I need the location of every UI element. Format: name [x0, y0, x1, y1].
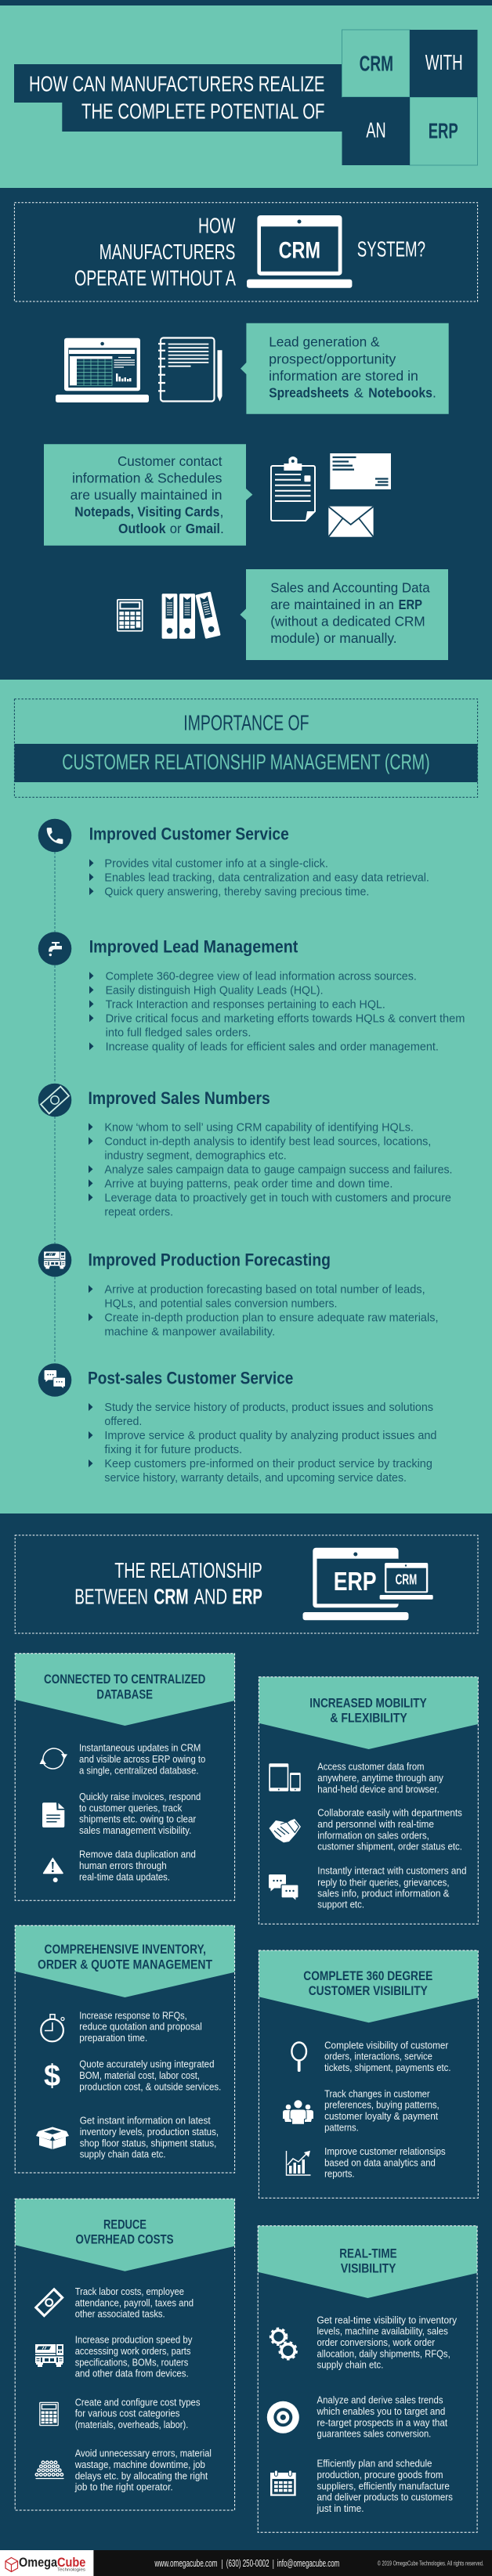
icon: ERP and CRM laptops — [302, 1548, 436, 1620]
logo: OmegaCube Technologies: Technologies — [57, 2568, 85, 2573]
heading: importance of CRM: IMPORTANCE OF — [183, 710, 309, 734]
text: complete visibility: Complete visibility of customer — [324, 2040, 448, 2051]
panel: header — [0, 5, 492, 188]
callout: sales and accounting data: ERP — [399, 597, 422, 612]
text: quote accurately: Quote accurately using integrated — [79, 2059, 215, 2070]
card: increased mobility and flexibility: & FLEXIBILITY — [330, 1712, 407, 1726]
text: quickly raise invoices: sales management visibility. — [79, 1825, 191, 1836]
icon: warning — [43, 1857, 63, 1882]
card: real-time visibility: REAL-TIME — [339, 2246, 397, 2260]
bullet list: Analyze sales campaign data to gauge campaign success and failures. — [104, 1164, 453, 1176]
icon: phone — [38, 819, 71, 852]
icon: CRM laptop: CRM — [279, 237, 320, 263]
text: quote accurately: BOM, material cost, labor cost, — [79, 2070, 200, 2081]
bullet list — [89, 1121, 453, 1218]
title block — [14, 64, 342, 132]
icon: machine — [38, 1243, 71, 1277]
callout: spreadsheets and notebooks — [241, 323, 449, 414]
title word grid: CRM — [360, 52, 393, 76]
bullet list — [89, 857, 429, 898]
icon: chat bubbles — [38, 1363, 71, 1397]
text: track changes — [324, 2088, 440, 2133]
title block: THE COMPLETE POTENTIAL OF — [81, 99, 324, 124]
icon: dollar sign: $ — [44, 2059, 60, 2093]
callout: sales and accounting data: are maintained in an — [270, 597, 394, 612]
bullet list: industry segment, demographics etc. — [104, 1149, 287, 1162]
text: track labor costs — [75, 2286, 194, 2320]
callout: spreadsheets and notebooks: information are stored in — [269, 368, 418, 384]
icon: tablet and phone — [269, 1763, 301, 1791]
text: efficiently plan: production, procure goods from — [317, 2470, 443, 2480]
text: quickly raise invoices — [79, 1791, 201, 1836]
item: improved production forecasting — [38, 1243, 438, 1338]
bullet list: Arrive at production forecasting based on total number of leads, — [104, 1283, 425, 1296]
callout: notepads and visiting cards: , — [219, 504, 223, 520]
heading box: relationship — [15, 1535, 478, 1633]
bullet list: Track Interaction and responses pertaining to each HQL. — [106, 998, 385, 1011]
item: improved production forecasting: Improved Production Forecasting — [88, 1250, 331, 1270]
text: instantaneous updates: Instantaneous updates in CRM — [79, 1743, 201, 1754]
card: reduce overhead costs — [15, 2199, 235, 2510]
text: improve customer relationships — [324, 2146, 446, 2180]
bullet list — [89, 1283, 439, 1338]
callout: notepads and visiting cards: or — [170, 521, 182, 536]
callout: notepads and visiting cards: Notepads, Visiting Cards — [74, 504, 220, 520]
bullet list: Enables lead tracking, data centralization and easy data retrieval. — [104, 871, 429, 884]
logo: OmegaCube Technologies — [0, 2550, 93, 2576]
callout: spreadsheets and notebooks: & — [354, 384, 364, 400]
footer — [0, 2550, 492, 2576]
callout: spreadsheets and notebooks: Lead generation & — [269, 334, 380, 350]
text: get instant information: shop floor status, shipment status, — [80, 2138, 216, 2148]
contact details: info@omegacube.com — [277, 2558, 339, 2569]
item: post-sales customer service: Post-sales Customer Service — [88, 1368, 293, 1387]
text: access customer data — [317, 1762, 444, 1795]
bullet list: Drive critical focus and marketing efforts towards HQLs & convert them — [106, 1012, 465, 1025]
heading box: how manufacturers operate without a CRM system: OPERATE WITHOUT A — [74, 265, 236, 290]
card: comprehensive inventory, order and quote management — [15, 1925, 235, 2173]
text: avoid unnecessary errors — [74, 2448, 212, 2493]
callout: spreadsheets and notebooks: . — [432, 384, 436, 400]
bullet list: Easily distinguish High Quality Leads (HQL). — [106, 984, 323, 997]
card: connected to centralized database: DATABASE — [96, 1687, 153, 1701]
bullet list: Know ‘whom to sell’ using CRM capability of identifying HQLs. — [104, 1121, 414, 1134]
heading box: how manufacturers operate without a CRM system — [14, 203, 478, 301]
callout: spreadsheets and notebooks: Notebooks — [368, 384, 432, 400]
logo: OmegaCube Technologies: Cube — [57, 2556, 85, 2570]
text: remove data duplication: human errors through — [79, 1860, 167, 1871]
callout: sales and accounting data — [240, 569, 448, 660]
contact details: (630) 250-0002 — [226, 2558, 270, 2569]
logo: OmegaCube Technologies: Omega — [19, 2556, 58, 2570]
text: increase response — [79, 2010, 202, 2044]
icon: calculator — [117, 599, 143, 632]
card: comprehensive inventory, order and quote management: COMPREHENSIVE INVENTORY, — [44, 1943, 206, 1957]
text: get real-time visibility: allocation, daily shipments, RFQs, — [317, 2348, 450, 2359]
text: avoid unnecessary errors: wastage, machine downtime, job — [74, 2459, 205, 2470]
text: create and configure — [75, 2397, 201, 2430]
icon: magnifier — [291, 2042, 306, 2072]
bullet list: Increase quality of leads for efficient sales and order management. — [106, 1041, 439, 1053]
bullet list: offered. — [104, 1416, 142, 1428]
icon: chat bubbles — [269, 1874, 298, 1901]
heading box: how manufacturers operate without a CRM system: SYSTEM? — [357, 237, 425, 262]
icon: target — [267, 2401, 299, 2433]
icon: calendar — [270, 2470, 296, 2496]
icon: banknote — [34, 2288, 64, 2318]
icon: growth chart — [287, 2151, 310, 2175]
text: instantaneous updates: and visible across ERP owing to — [79, 1754, 205, 1765]
card: real-time visibility: VISIBILITY — [341, 2261, 396, 2275]
text: improve customer relationships: Improve customer relationsips — [324, 2146, 446, 2157]
contact details: www.omegacube.com — [154, 2558, 218, 2569]
icon: machine — [35, 2344, 63, 2367]
icon: clipboard — [271, 456, 315, 521]
item: improved sales numbers — [38, 1084, 452, 1218]
icon: notebook and pencil — [158, 338, 222, 402]
text: complete visibility: tickets, shipment, payments etc. — [324, 2062, 451, 2073]
icon: pile of rolls — [36, 2462, 63, 2479]
text: instantaneous updates: a single, centralized database. — [79, 1765, 199, 1776]
text: quote accurately — [79, 2059, 221, 2092]
icon: document — [42, 1802, 64, 1827]
heading box: relationship: BETWEEN — [74, 1584, 148, 1608]
text: get real-time visibility: Get real-time visibility to inventory — [317, 2314, 458, 2325]
text: analyze and derive: Analyze and derive sales trends — [317, 2395, 443, 2406]
card: complete 360 degree customer visibility: CUSTOMER VISIBILITY — [309, 1984, 428, 1998]
icon: open box — [36, 2127, 69, 2149]
bullet list: service history, warranty details, and upcoming service dates. — [104, 1472, 407, 1485]
panel: relationship between CRM and ERP — [0, 1513, 492, 2550]
text: quote accurately: production cost, & outside services. — [79, 2081, 221, 2092]
text: remove data duplication: Remove data duplication and — [79, 1849, 196, 1860]
text: get real-time visibility: order conversions, work order — [317, 2337, 435, 2348]
text: create and configure: (materials, overheads, labor). — [75, 2419, 188, 2430]
text: quickly raise invoices: Quickly raise invoices, respond — [79, 1791, 201, 1802]
text: increase production speed: Increase production speed by — [75, 2335, 193, 2346]
item: improved lead management: Improved Lead Management — [89, 937, 298, 957]
icon: tap — [38, 932, 71, 965]
text: access customer data: Access customer data from — [317, 1762, 425, 1773]
text: collaborate easily — [317, 1808, 462, 1853]
card: comprehensive inventory, order and quote management: ORDER & QUOTE MANAGEMENT — [38, 1957, 212, 1972]
icon: handshake — [270, 1819, 301, 1842]
text: instantaneous updates — [79, 1743, 205, 1776]
text: avoid unnecessary errors: Avoid unnecessary errors, material — [75, 2448, 212, 2459]
callout: notepads and visiting cards: are usually maintained in — [71, 487, 222, 503]
text: analyze and derive: re-target prospects in a way that — [317, 2417, 448, 2428]
text: efficiently plan: suppliers, efficiently manufacture — [317, 2480, 450, 2491]
text: collaborate easily: customer shipment, order status etc. — [317, 1842, 462, 1853]
icon: ERP and CRM laptops: CRM — [396, 1572, 417, 1588]
callout: notepads and visiting cards — [44, 444, 252, 546]
text: efficiently plan — [317, 2459, 453, 2514]
text: create and configure: Create and configure cost types — [75, 2397, 201, 2408]
callout: notepads and visiting cards: Gmail — [186, 521, 220, 536]
bullet list: Complete 360-degree view of lead information across sources. — [106, 970, 417, 983]
text: increase production speed: accesssing work orders, parts — [75, 2346, 191, 2357]
callout: sales and accounting data: Sales and Accounting Data — [270, 580, 430, 596]
text: get real-time visibility: supply chain etc. — [317, 2360, 383, 2371]
bullet list: Keep customers pre-informed on their product service by tracking — [104, 1458, 432, 1470]
bullet list — [89, 1402, 437, 1485]
text: increase production speed: specifications, BOMs, routers — [75, 2357, 188, 2368]
text: increase production speed — [75, 2335, 193, 2379]
text: get instant information: Get instant information on latest — [80, 2116, 211, 2127]
card: real-time visibility — [258, 2226, 477, 2532]
text: quickly raise invoices: shipments etc. owing to clear — [79, 1814, 196, 1825]
text: instantly interact: support etc. — [317, 1900, 364, 1910]
item: improved sales numbers: Improved Sales Numbers — [88, 1088, 270, 1108]
card: reduce overhead costs: OVERHEAD COSTS — [75, 2233, 174, 2247]
text: get real-time visibility — [317, 2314, 458, 2371]
bullet list: machine & manpower availability. — [104, 1326, 275, 1338]
bullet list: Arrive at buying patterns, peak order time and down time. — [104, 1178, 393, 1190]
text: increase response: Increase response to RFQs, — [79, 2010, 187, 2021]
text: track changes: customer loyalty & payment — [324, 2111, 439, 2122]
item: post-sales customer service — [38, 1363, 436, 1485]
card: complete 360 degree customer visibility — [259, 1950, 478, 2198]
text: instantly interact: reply to their queries, grievances, — [317, 1877, 450, 1888]
bullet list: Quick query answering, thereby saving precious time. — [104, 886, 369, 898]
callout: notepads and visiting cards: Customer contact — [118, 453, 222, 469]
text: increase production speed: and other data from devices. — [75, 2369, 189, 2379]
card: reduce overhead costs: REDUCE — [103, 2218, 147, 2232]
icon: people — [283, 2100, 313, 2124]
icon: banknote — [38, 1084, 71, 1117]
text: create and configure: for various cost categories — [75, 2408, 180, 2419]
text: track changes: preferences, buying patterns, — [324, 2100, 440, 2111]
text: get instant information — [80, 2116, 219, 2160]
card: increased mobility and flexibility — [259, 1677, 478, 1924]
text: get instant information: inventory levels, production status, — [80, 2127, 219, 2138]
bullet list: into full fledged sales orders. — [106, 1026, 251, 1039]
bullet list: fixing it for future products. — [104, 1444, 242, 1456]
callout: notepads and visiting cards: Outlook — [118, 521, 166, 536]
background: dark top strip — [0, 0, 492, 6]
text: improve customer relationships: reports. — [324, 2169, 355, 2180]
text: remove data duplication — [79, 1849, 196, 1882]
heading box: how manufacturers operate without a CRM system: HOW — [198, 213, 235, 237]
icon: gears — [270, 2329, 297, 2359]
bullet list: Improve service & product quality by analyzing product issues and — [104, 1430, 437, 1442]
text: analyze and derive: which enables you to target and — [317, 2406, 445, 2417]
text: avoid unnecessary errors: job to the right operator. — [74, 2482, 173, 2493]
text: get real-time visibility: levels, machine availability, sales — [317, 2326, 448, 2337]
icon: visiting card — [330, 453, 391, 489]
card: connected to centralized database — [15, 1654, 235, 1900]
icon: spreadsheet laptop — [56, 338, 149, 402]
text: instantly interact: sales info, product information & — [317, 1888, 450, 1899]
text: analyze and derive: guarantees sales conversion. — [317, 2429, 431, 2440]
text: instantly interact: Instantly interact with customers and — [317, 1866, 467, 1877]
card: connected to centralized database: CONNECTED TO CENTRALIZED — [44, 1672, 205, 1687]
callout: sales and accounting data: (without a dedicated CRM — [270, 613, 425, 629]
text: remove data duplication: real-time data updates. — [79, 1871, 170, 1882]
heading box: how manufacturers operate without a CRM system: MANUFACTURERS — [99, 240, 235, 264]
text: efficiently plan: Efficiently plan and schedule — [317, 2459, 432, 2470]
text: instantly interact — [317, 1866, 467, 1910]
text: efficiently plan: just in time. — [317, 2503, 364, 2514]
bullet list: repeat orders. — [104, 1206, 173, 1218]
title block: HOW CAN MANUFACTURERS REALIZE — [29, 72, 324, 96]
contact details — [154, 2558, 339, 2569]
heading box: relationship: THE RELATIONSHIP — [114, 1558, 262, 1582]
icon: calculator — [39, 2402, 59, 2426]
card: complete 360 degree customer visibility: COMPLETE 360 DEGREE — [303, 1969, 432, 1983]
text: improve customer relationships: based on data analytics and — [324, 2157, 436, 2168]
heading box: relationship: AND — [194, 1584, 227, 1608]
text: collaborate easily: Collaborate easily with departments — [317, 1808, 462, 1819]
bullet list: Conduct in-depth analysis to identify best lead sources, locations, — [104, 1135, 431, 1148]
title word grid — [342, 30, 478, 165]
text: access customer data: anywhere, anytime through any — [317, 1773, 444, 1784]
bullet list: Provides vital customer info at a single-click. — [104, 857, 328, 870]
text: get instant information: supply chain data etc. — [80, 2149, 166, 2160]
text: efficiently plan: and deliver products to customers — [317, 2492, 453, 2503]
callout: sales and accounting data: module) or manually. — [270, 630, 397, 646]
text: increase response: reduce quotation and proposal — [79, 2022, 202, 2033]
bullet list: Create in-depth production plan to ensure adequate raw materials, — [104, 1311, 439, 1324]
icon: ERP and CRM laptops: ERP — [334, 1567, 377, 1596]
item: improved lead management — [38, 932, 465, 1053]
text: complete visibility: orders, interactions, service — [324, 2051, 432, 2062]
timeline connector — [54, 852, 56, 1363]
item: improved customer service — [38, 819, 429, 898]
text: increase response: preparation time. — [79, 2033, 147, 2044]
icon: sync arrows — [39, 1748, 67, 1769]
card: increased mobility and flexibility: INCREASED MOBILITY — [309, 1696, 427, 1710]
text: track changes: patterns. — [324, 2122, 359, 2133]
title word grid: AN — [366, 118, 386, 143]
bullet list — [89, 970, 465, 1053]
heading: importance of CRM — [14, 699, 478, 797]
text: analyze and derive — [317, 2395, 448, 2440]
bullet list: Study the service history of products, product issues and solutions — [104, 1402, 433, 1414]
text: avoid unnecessary errors: delays etc. by allocating the right — [75, 2470, 208, 2481]
item: improved customer service: Improved Customer Service — [89, 824, 289, 843]
heading box: relationship: ERP — [232, 1584, 262, 1608]
text: collaborate easily: and personnel with real-time — [317, 1819, 434, 1830]
text: collaborate easily: information on sales orders, — [317, 1830, 429, 1841]
callout: spreadsheets and notebooks: prospect/opportunity — [269, 351, 396, 366]
heading box: relationship: CRM — [154, 1584, 189, 1608]
bullet list: Leverage data to proactively get in touch with customers and procure — [104, 1192, 451, 1204]
icon: stopwatch — [41, 2015, 64, 2041]
bullet list: HQLs, and potential sales conversion numbers. — [104, 1297, 337, 1310]
callout: notepads and visiting cards: . — [220, 521, 224, 536]
callout: spreadsheets and notebooks: Spreadsheets — [269, 384, 349, 400]
text: quickly raise invoices: to customer queries, track — [79, 1802, 183, 1813]
callout: notepads and visiting cards: information & Schedules — [72, 470, 222, 485]
icon: CRM laptop — [247, 215, 352, 288]
text: track changes: Track changes in customer — [324, 2088, 430, 2099]
icon: envelope — [328, 507, 374, 537]
text: complete visibility — [324, 2040, 451, 2073]
title word grid: WITH — [425, 50, 463, 74]
text: access customer data: hand-held device and browser. — [317, 1784, 440, 1795]
title word grid: ERP — [429, 119, 458, 143]
panel: importance of CRM — [0, 680, 492, 1513]
panel: operating without CRM — [0, 188, 492, 680]
text: track labor costs: Track labor costs, employee — [75, 2286, 184, 2297]
text: track labor costs: other associated tasks. — [75, 2309, 165, 2320]
text: track labor costs: attendance, payroll, taxes and — [75, 2297, 194, 2308]
icon: binders — [162, 591, 221, 639]
